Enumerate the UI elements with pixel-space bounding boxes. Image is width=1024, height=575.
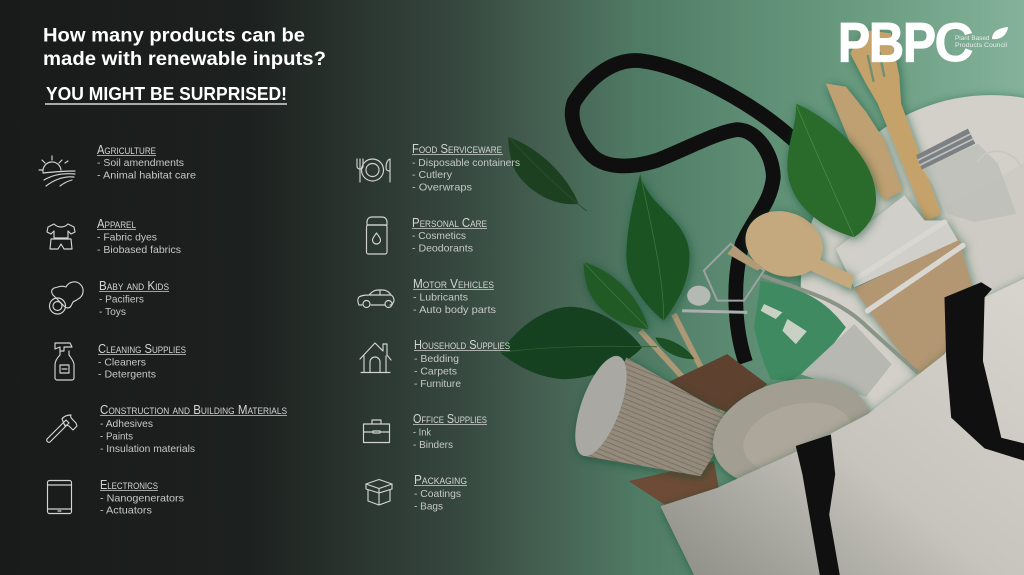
icon: plate with cutlery <box>357 159 390 182</box>
category: Household Supplies <box>360 338 510 390</box>
kraft cup with white cup inside <box>836 195 993 374</box>
tote handle right <box>944 282 1024 466</box>
knife <box>826 83 903 200</box>
text: Office Supplies <box>413 412 487 451</box>
logo: PBPC: Plant Based <box>955 35 990 42</box>
category: Baby and Kids <box>50 279 169 318</box>
large leaf upper <box>787 103 876 237</box>
canvas tote bag <box>660 271 1024 575</box>
category: Apparel <box>47 217 181 256</box>
text: Construction and Building Materials: - Paints <box>100 430 133 442</box>
tote handle front <box>796 434 841 575</box>
category: Cleaning Supplies <box>55 342 186 380</box>
green glass bottle <box>754 281 846 381</box>
text: Construction and Building Materials: Construction and Building Materials <box>100 403 287 417</box>
text: Electronics <box>100 478 184 516</box>
text: Apparel: Apparel <box>97 217 136 231</box>
jar with metal lid <box>916 129 1021 222</box>
text: Motor Vehicles: - Lubricants <box>413 292 468 304</box>
text: Construction and Building Materials <box>100 403 287 455</box>
category: Food Serviceware <box>357 142 520 194</box>
logo: PBPC: C <box>934 10 974 74</box>
text: Agriculture <box>97 143 196 182</box>
large leaf left <box>500 307 657 379</box>
paper plate <box>801 95 1024 476</box>
text: Personal Care: Personal Care <box>412 216 487 230</box>
strap: black bag handle <box>572 61 794 363</box>
lower middle leaf <box>584 262 649 329</box>
text: Electronics: - Actuators <box>100 504 152 516</box>
wooden spoon <box>736 201 854 289</box>
text: Packaging: - Coatings <box>414 488 461 500</box>
logo: PBPC <box>838 10 1008 74</box>
text: Personal Care: - Cosmetics <box>412 230 466 242</box>
title: made with renewable inputs? <box>43 49 326 70</box>
icon: spray bottle <box>55 343 74 380</box>
text: Household Supplies: - Carpets <box>414 366 457 378</box>
icon: briefcase <box>364 420 390 442</box>
middle leaf <box>626 174 690 321</box>
fork <box>850 30 941 222</box>
text: Agriculture: - Soil amendments <box>97 157 184 169</box>
icon: hammer <box>47 415 77 442</box>
category: Construction and Building Materials <box>47 403 287 455</box>
title <box>43 26 326 70</box>
white cloth behind jar <box>944 154 1024 304</box>
text: Personal Care: - Deodorants <box>412 242 473 254</box>
white label card <box>801 324 892 397</box>
category: Motor Vehicles <box>358 277 496 316</box>
text: Food Serviceware: Food Serviceware <box>412 142 502 156</box>
logo: PBPC: P <box>903 10 936 74</box>
text: Cleaning Supplies: - Cleaners <box>98 356 146 368</box>
text: Motor Vehicles: Motor Vehicles <box>413 277 494 291</box>
straws <box>640 314 724 413</box>
small leaf centre <box>655 337 695 359</box>
text: Household Supplies: - Bedding <box>414 353 459 365</box>
brown kraft paper <box>629 354 767 506</box>
text: Construction and Building Materials: - Adhesives <box>100 418 153 430</box>
title: How many products can be <box>43 26 305 46</box>
icon: pacifier <box>50 282 83 314</box>
text: Electronics: Electronics <box>100 478 158 492</box>
category: Agriculture <box>39 143 196 186</box>
text: Food Serviceware: - Cutlery <box>412 169 453 181</box>
category: Electronics <box>48 478 184 516</box>
text: Apparel: - Fabric dyes <box>97 232 157 244</box>
text: Food Serviceware: - Disposable containers <box>412 157 520 169</box>
text: Packaging: Packaging <box>414 473 467 487</box>
glass bottle outline and clasp <box>682 244 918 373</box>
icon: shirt and shorts <box>47 224 75 249</box>
icon: leaf <box>992 27 1008 39</box>
icon: tablet <box>48 480 72 514</box>
category: Office Supplies <box>364 412 487 451</box>
text: Household Supplies: - Furniture <box>414 378 461 390</box>
text: Baby and Kids <box>99 279 169 318</box>
text: Household Supplies <box>414 338 510 390</box>
icon: house <box>360 343 391 372</box>
text: Motor Vehicles <box>413 277 496 316</box>
text: Apparel: - Biobased fabrics <box>97 244 181 256</box>
text: Personal Care <box>412 216 487 254</box>
icon: box <box>366 480 392 505</box>
text: Agriculture: Agriculture <box>97 143 156 157</box>
text: Apparel <box>97 217 181 256</box>
text: Office Supplies: - Ink <box>413 426 432 438</box>
bamboo fibre plate <box>701 363 882 502</box>
category: Personal Care <box>366 216 487 254</box>
text: Office Supplies: - Binders <box>413 439 453 451</box>
text: Agriculture: - Animal habitat care <box>97 170 196 182</box>
text: Baby and Kids: Baby and Kids <box>99 279 169 293</box>
subtitle: YOU MIGHT BE SURPRISED! <box>46 84 287 104</box>
text: Household Supplies: Household Supplies <box>414 338 510 352</box>
text: Construction and Building Materials: - Insulation materials <box>100 443 195 455</box>
photo: eco-friendly products spilling from a tote bag <box>500 30 1024 575</box>
text: Motor Vehicles: - Auto body parts <box>413 304 496 316</box>
icon: deodorant stick <box>366 217 387 254</box>
text: Office Supplies: Office Supplies <box>413 412 487 426</box>
icon: car <box>358 290 394 308</box>
text: Cleaning Supplies: - Detergents <box>98 368 156 380</box>
text: Packaging <box>414 473 467 512</box>
text: Food Serviceware: - Overwraps <box>412 182 472 194</box>
corrugated cup <box>565 350 724 476</box>
icon: sun over fields <box>39 156 75 186</box>
text: Cleaning Supplies <box>98 342 186 380</box>
logo: PBPC: P <box>838 10 870 74</box>
text: Cleaning Supplies: Cleaning Supplies <box>98 342 186 356</box>
text: Baby and Kids: - Toys <box>99 306 126 318</box>
category: Packaging <box>366 473 467 512</box>
text: Electronics: - Nanogenerators <box>100 492 184 504</box>
text: Packaging: - Bags <box>414 500 443 512</box>
text: Baby and Kids: - Pacifiers <box>99 294 144 306</box>
logo: PBPC: B <box>869 10 904 74</box>
text: Food Serviceware <box>412 142 520 194</box>
logo: PBPC: Products Council <box>955 42 1007 49</box>
small leaf upper left <box>508 137 587 211</box>
